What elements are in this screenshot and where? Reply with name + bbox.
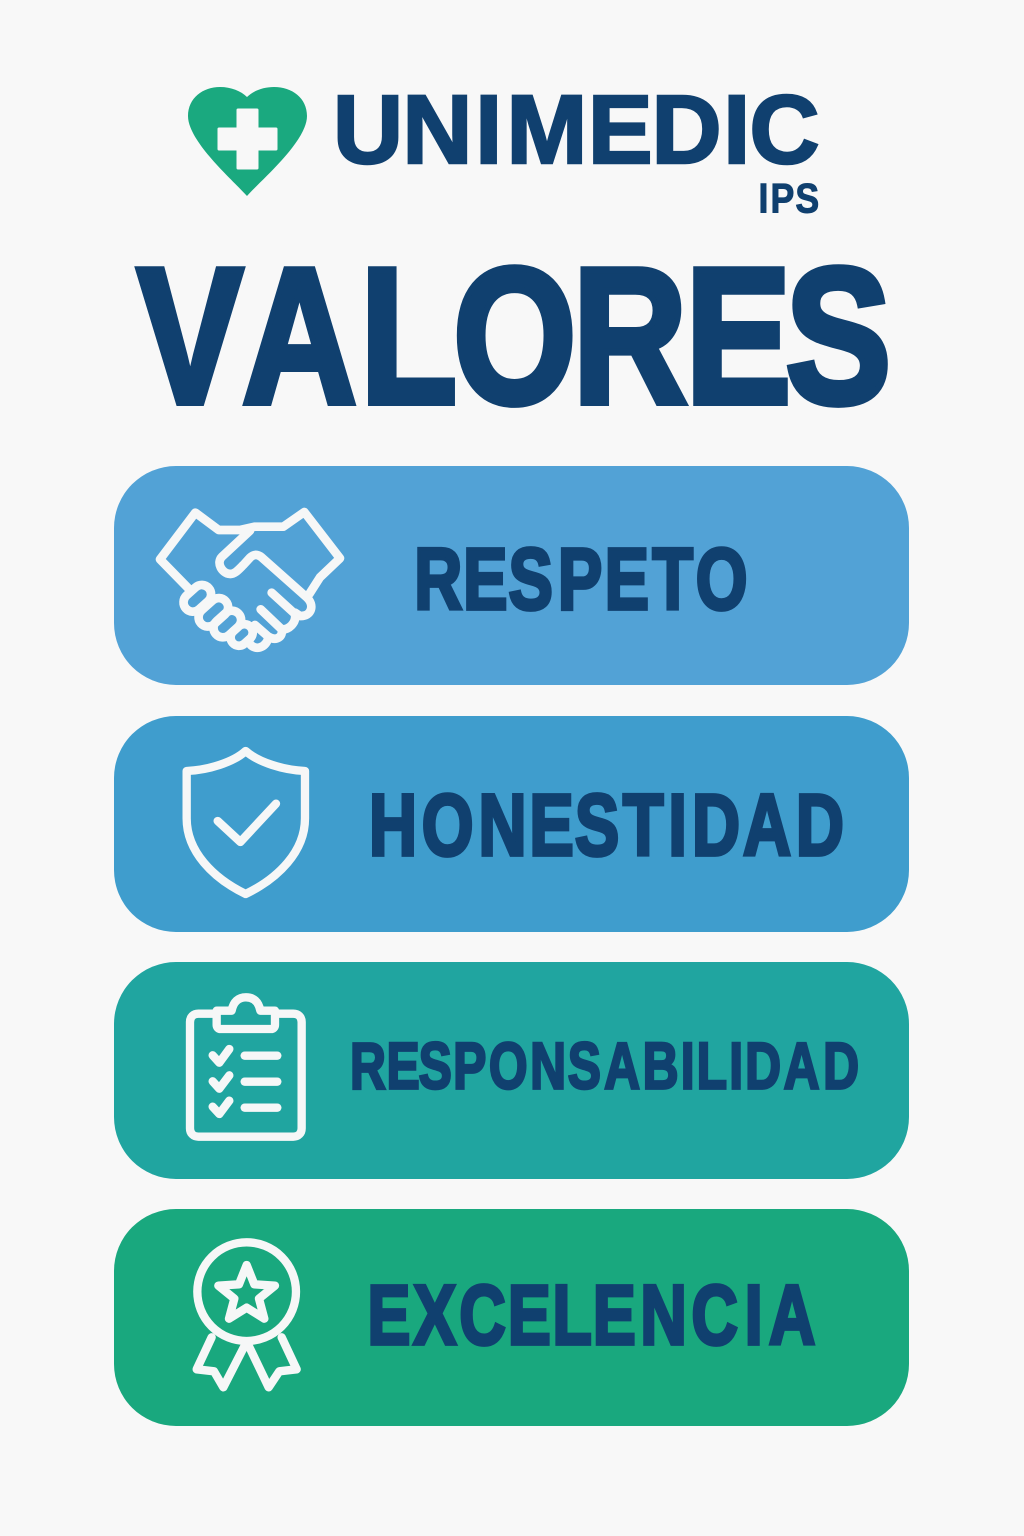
icon: clipboard checklist (190, 997, 302, 1137)
title: VALORES (137, 229, 891, 444)
panel: excelencia (114, 1209, 909, 1426)
panel: honestidad (114, 716, 909, 932)
panel: responsabilidad (114, 962, 909, 1179)
icon: shield with check (187, 751, 305, 894)
label: excelencia: EXCELENCIA (367, 1267, 815, 1362)
label: responsabilidad: RESPONSABILIDAD (350, 1030, 859, 1103)
label: respeto: RESPETO (414, 531, 748, 628)
brand subtitle: IPS (759, 176, 819, 222)
icon: handshake (160, 512, 340, 649)
brand name: UNIMEDIC (333, 75, 820, 184)
panel: respeto (114, 466, 909, 685)
icon: heart with medical cross (188, 87, 307, 196)
icon: award ribbon with star (197, 1242, 297, 1387)
logo: Unimedic IPS (188, 75, 820, 222)
label: honestidad: HONESTIDAD (369, 777, 844, 874)
